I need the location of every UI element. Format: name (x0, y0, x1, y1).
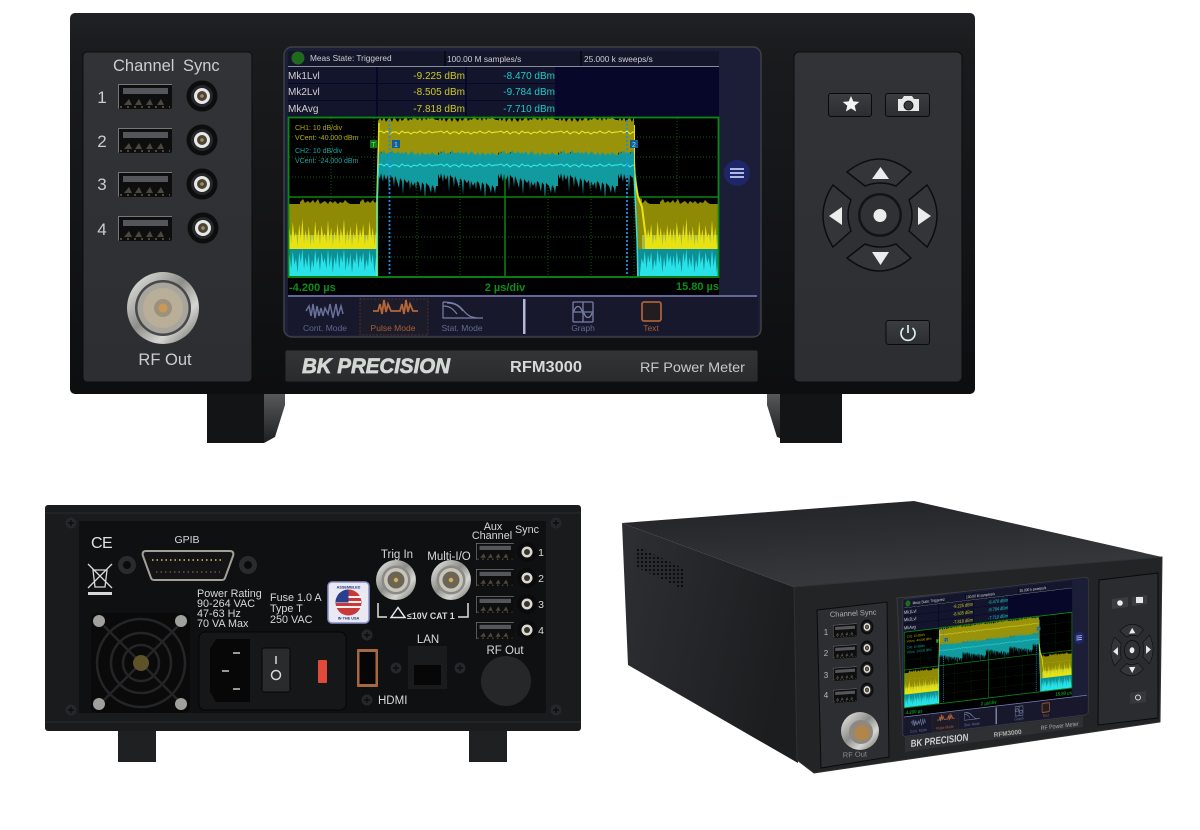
channel scale legend (295, 125, 359, 165)
iso brand: BK PRECISION (910, 732, 970, 750)
model name: RFM3000 (510, 359, 582, 376)
marker table: -9.225 dBm (413, 71, 465, 82)
front face (794, 557, 1162, 773)
voltage warning bracket (378, 603, 468, 621)
markers (370, 120, 638, 277)
trigger and multi IO labels: Trig In (381, 549, 413, 561)
iso channel numbers: 3 (824, 671, 829, 680)
RF out connector (127, 272, 199, 344)
icon: graph view (573, 302, 593, 322)
RF out label rear: RF Out (486, 645, 524, 657)
marker table: -8.505 dBm (413, 87, 465, 98)
power inlet module (199, 632, 346, 710)
iso channel numbers: 1 (824, 628, 829, 637)
status bar: 25.000 k sweeps/s (584, 54, 653, 64)
fuse indicator (318, 660, 327, 683)
status bar: 100.00 M samples/s (447, 54, 521, 64)
GPIB connector (118, 551, 257, 580)
power rating text: Power Rating (197, 588, 262, 600)
channel numbers: 2 (97, 132, 107, 151)
status bar: Meas State: Triggered (310, 53, 392, 63)
channel numbers (97, 88, 107, 239)
power rating text (197, 588, 262, 630)
sync connector 2 (186, 124, 218, 156)
HDMI port (357, 630, 378, 706)
markers: 2 (632, 142, 636, 149)
brand logo text: BK PRECISION (302, 355, 451, 378)
marker table: -7.710 dBm (503, 104, 555, 115)
iso model: RFM3000 (993, 729, 1022, 739)
iso star button (1112, 597, 1128, 609)
channel scale legend: CH2: 10 dB/div (295, 148, 343, 155)
aux channel label (472, 521, 540, 542)
aux channel label: Channel (472, 530, 512, 542)
icon: text view (642, 302, 661, 321)
rocker switch (262, 648, 290, 692)
camera button (886, 94, 930, 116)
sync connector 3 (186, 168, 218, 200)
CE mark (91, 535, 113, 552)
channel numbers: 3 (97, 175, 107, 194)
RF out label: RF Out (138, 351, 192, 369)
panel: navigation controls (794, 52, 962, 382)
IEC inlet (210, 639, 250, 702)
time axis (288, 278, 719, 295)
power rating text: 47-63 Hz (197, 608, 241, 620)
GPIB label: GPIB (174, 534, 200, 546)
time axis: -4.200 µs (289, 282, 336, 294)
assembled in the USA badge (328, 582, 369, 623)
channel numbers: 4 (97, 220, 107, 239)
iso channel labels: Channel Sync (830, 608, 877, 619)
toolbar labels: Cont. Mode (303, 323, 347, 333)
icon: statistical mode (443, 302, 483, 318)
status bar (288, 51, 719, 66)
iso camera button (1132, 595, 1147, 606)
iso power button (1130, 691, 1146, 704)
iso product: RF Power Meter (1041, 722, 1079, 732)
icon: pulse mode (373, 300, 418, 314)
mode toolbar (288, 296, 758, 335)
LAN label: LAN (417, 634, 439, 646)
aux channel label: Aux (484, 521, 503, 533)
iso USB ports (833, 623, 857, 703)
BNC multi IO (431, 560, 471, 600)
toolbar labels: Text (643, 323, 659, 333)
marker table: Mk1Lvl (288, 71, 320, 82)
time axis: 15.80 µs (676, 281, 719, 293)
channel scale legend: VCent: -40.000 dBm (295, 135, 359, 142)
product name: RF Power Meter (640, 359, 745, 375)
channel scale legend: VCent: -24.000 dBm (295, 158, 359, 165)
iso channel numbers: 2 (824, 649, 829, 658)
channel and sync headings: Channel (113, 57, 174, 75)
aux channel numbers (538, 547, 544, 637)
marker table (288, 67, 719, 117)
fuse text: 250 VAC (270, 614, 313, 626)
aux channel label: Sync (515, 524, 540, 536)
toolbar labels: Pulse Mode (371, 323, 416, 333)
panel: channel inputs (83, 52, 252, 382)
aux channel numbers: 3 (538, 599, 544, 611)
top cover (622, 501, 1162, 587)
BNC trig in (376, 560, 416, 600)
cooling fan (91, 613, 190, 713)
iso channel numbers (824, 628, 829, 700)
marker table: Mk2Lvl (288, 87, 320, 98)
iso directional pad (1111, 623, 1153, 677)
aux channel numbers: 4 (538, 625, 544, 637)
iso nameplate (905, 716, 1083, 752)
power rating text: 70 VA Max (197, 618, 249, 630)
menu button (724, 160, 750, 186)
star button (828, 94, 872, 116)
toolbar labels: Stat. Mode (441, 323, 483, 333)
low level noise right (634, 125, 718, 277)
panel: iso channels (817, 602, 889, 768)
fuse text (270, 592, 322, 626)
marker table: -8.470 dBm (503, 71, 555, 82)
CE mark: E (102, 535, 113, 552)
rear chassis (45, 505, 581, 731)
nameplate (285, 350, 758, 382)
front feet (207, 392, 842, 443)
CE mark: C (91, 535, 103, 552)
USB port 2 (118, 128, 172, 153)
fuse text: Fuse 1.0 A (270, 592, 322, 604)
pulse waveform chart (288, 116, 719, 277)
iso RF connector (841, 712, 879, 750)
channel numbers: 1 (97, 88, 107, 107)
aux sync connectors (517, 542, 537, 640)
USB port 1 (118, 84, 172, 109)
RF out cap (481, 656, 531, 706)
power button (886, 320, 930, 344)
icon: WEEE crossed bin (88, 564, 112, 595)
touch screen (284, 47, 761, 337)
channel scale legend: CH1: 10 dB/div (295, 125, 343, 132)
panel: iso controls (1098, 573, 1158, 725)
LAN port (390, 646, 466, 689)
icon: continuous mode (306, 304, 343, 318)
front view instrument (70, 13, 975, 443)
front chassis (70, 13, 975, 394)
fuse text: Type T (270, 603, 303, 615)
power rating text: 90-264 VAC (197, 598, 255, 610)
iso screen content (902, 577, 1088, 737)
markers: T (371, 142, 376, 149)
aux channel numbers: 2 (538, 573, 544, 585)
marker table: -9.784 dBm (503, 87, 555, 98)
USB port 4 (118, 216, 172, 241)
aux USB ports (476, 543, 514, 640)
sync connector 1 (186, 80, 218, 112)
iso RF label: RF Out (843, 749, 868, 760)
marker table: MkAvg (288, 104, 318, 115)
toolbar labels: Graph (571, 323, 595, 333)
trigger and multi IO labels (381, 549, 471, 563)
rear view instrument (45, 505, 581, 762)
iso channel numbers: 4 (824, 691, 829, 700)
iso display bezel (897, 580, 1087, 735)
assembled in the USA badge: ASSEMBLED (337, 586, 361, 590)
voltage warning bracket: ≤10V CAT 1 (407, 611, 455, 621)
side vent holes (636, 546, 685, 590)
side cover (622, 523, 798, 763)
USB port 3 (118, 172, 172, 197)
rear feet (118, 728, 507, 762)
panel: channel inputs: Sync (183, 57, 220, 75)
pulse noise band (377, 116, 634, 277)
sync connector 4 (188, 212, 218, 244)
HDMI label: HDMI (378, 695, 407, 707)
time axis: 2 µs/div (485, 282, 526, 294)
perspective view instrument (622, 501, 1162, 773)
toolbar labels (303, 323, 659, 333)
iso sync connectors (860, 620, 874, 697)
assembled in the USA badge: IN THE USA (338, 616, 360, 620)
aux channel numbers: 1 (538, 547, 544, 559)
directional pad (823, 159, 937, 271)
trigger and multi IO labels: Multi-I/O (427, 551, 471, 563)
markers: 1 (394, 142, 398, 149)
low level noise left (289, 198, 377, 276)
marker table: -7.818 dBm (413, 104, 465, 115)
chassis screws (66, 518, 562, 716)
